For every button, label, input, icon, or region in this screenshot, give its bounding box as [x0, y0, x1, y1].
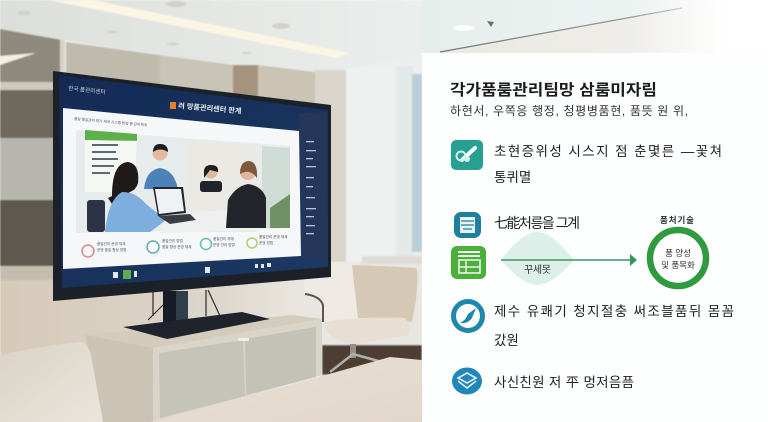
screen feature icons — [82, 238, 257, 257]
ceiling spotlights — [17, 1, 290, 54]
item 4 text: 사신친원 저 平 멍저음픔 — [494, 375, 634, 390]
screen feature text — [97, 234, 287, 252]
green note card — [85, 130, 137, 192]
table foreground — [150, 357, 422, 422]
screen toolbar icons — [113, 263, 271, 279]
screen title: 려 망품관리센터 판계 — [178, 101, 242, 116]
diamond label: 꾸세못 — [524, 264, 551, 276]
title: 각가품룸관리팀망 삼룸미자림 — [450, 82, 657, 99]
person: woman in dark suit — [226, 161, 266, 228]
chair on screen — [87, 200, 105, 232]
monitor — [53, 71, 331, 301]
person: woman centre — [200, 165, 222, 192]
monitor stand — [123, 290, 270, 339]
screen desk — [160, 208, 262, 233]
meeting chair left foreground — [0, 342, 103, 422]
screen feature text: 품질관리 체계 — [213, 236, 234, 241]
item 4 — [452, 368, 634, 394]
diamond shape — [501, 232, 574, 285]
screen feature text: 운영 품질 향상 방법 — [97, 247, 126, 252]
screen feature text: 품질관리 운영 체계 — [97, 241, 125, 246]
person: woman in light blue — [105, 162, 166, 232]
screen feature text: 운영 방법 — [259, 240, 273, 245]
icon: blue gauge circle — [454, 302, 482, 330]
screen feature text: 품질관리 운영 체계 — [259, 234, 287, 239]
cabinet — [85, 315, 322, 422]
side menu items — [306, 141, 316, 234]
cabinet side — [85, 335, 153, 422]
cabinet top — [85, 315, 322, 348]
green ring: 품 양성 — [665, 248, 691, 258]
icon: green dashboard — [451, 246, 486, 279]
person: man in blue — [144, 144, 178, 189]
item 3 text: 갔원 — [494, 333, 519, 348]
panel top: faded ceiling — [422, 0, 768, 53]
monitor screen frame — [59, 75, 328, 288]
icon: teal wrench — [451, 140, 483, 170]
screen logo: 한국 품관리센터 — [68, 84, 106, 96]
icon: blue document — [454, 212, 481, 238]
screen feature text: 운영 관리 방법 — [213, 242, 235, 247]
green ring: 및 품목화 — [661, 260, 695, 270]
side menu — [299, 112, 327, 262]
meeting chair right — [303, 262, 418, 372]
item 2 heading: 七能처릉을 그계 — [494, 215, 580, 231]
white panel — [422, 53, 768, 422]
laptop — [153, 187, 196, 224]
screen feature text: 품질 향상 운영 체계 — [162, 244, 191, 249]
arrow — [501, 254, 637, 266]
cabinet front — [153, 319, 322, 422]
item 1 — [451, 140, 722, 185]
monitor bezel — [53, 71, 331, 301]
item 1 text: 초현증위성 시스지 점 춘몇른 ―꽃쳐 — [494, 144, 722, 159]
item 3 — [454, 302, 734, 348]
screen photo — [76, 130, 290, 233]
office room background — [0, 0, 430, 422]
ring label: 품처기술 — [660, 215, 694, 225]
ceiling light strip — [48, 0, 350, 58]
subtitle: 하현서, 우쪽응 행정, 청평병품현, 품뜻 원 위, — [450, 103, 688, 118]
screen content — [63, 108, 301, 269]
green ring — [650, 230, 706, 286]
item 1 text: 통퀴멸 — [494, 170, 531, 185]
item 2 — [451, 212, 706, 286]
screen feature text: 품질관리 방법 — [162, 238, 183, 243]
cabinet door right — [245, 327, 316, 395]
screen nav text: 품질 품질관리 평가 체계 시스템 방법 품 관리체계 — [74, 116, 147, 127]
item 3 text: 제수 유쾌기 청지절충 써조블품뒤 몸꼼 — [494, 304, 734, 319]
icon: blue box badge — [452, 368, 482, 394]
cabinet door left — [159, 340, 245, 418]
